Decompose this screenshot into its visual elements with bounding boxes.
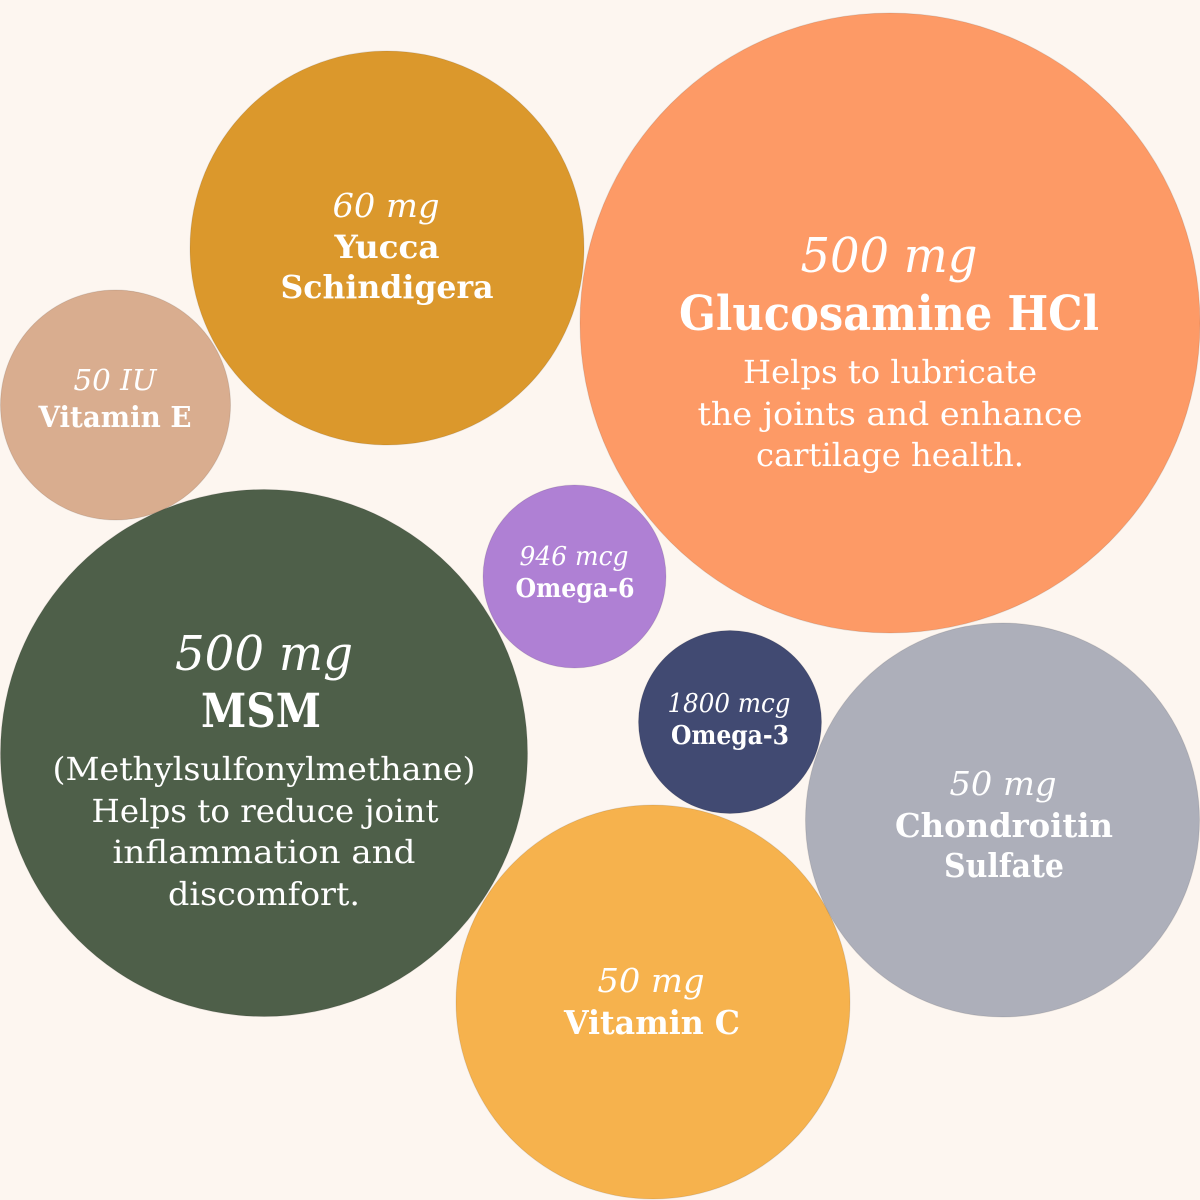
- bubble: Yucca Schindigera: 60 mg: [332, 186, 440, 225]
- bubble: Omega-3: 1800 mcg: [668, 689, 790, 719]
- bubble: Omega-6: Omega-6: [516, 574, 634, 604]
- bubble: Omega-6: 946 mcg: [520, 542, 628, 572]
- bubble: MSM: discomfort.: [168, 875, 360, 913]
- bubble: Chondroitin Sulfate: 50 mg: [950, 764, 1056, 803]
- bubble: Yucca Schindigera: [190, 51, 584, 445]
- bubble: Chondroitin Sulfate: Sulfate: [944, 846, 1064, 885]
- bubble: Glucosamine HCl: the joints and enhance: [698, 395, 1082, 433]
- bubble: MSM: Helps to reduce joint: [92, 792, 439, 830]
- bubble: Yucca Schindigera: Yucca: [333, 228, 440, 266]
- bubble: Glucosamine HCl: 500 mg: [800, 228, 978, 284]
- bubble: Glucosamine HCl: Helps to lubricate: [743, 353, 1037, 391]
- bubble: Chondroitin Sulfate: Chondroitin: [895, 806, 1113, 845]
- bubble: MSM: inflammation and: [112, 833, 416, 871]
- bubble: Chondroitin Sulfate: [806, 623, 1200, 1017]
- bubble: MSM: MSM: [201, 684, 321, 739]
- bubble: Vitamin C: 50 mg: [598, 961, 704, 1000]
- bubble: Glucosamine HCl: cartilage health.: [756, 436, 1024, 474]
- bubble: Omega-3: [638, 630, 822, 814]
- bubble: Glucosamine HCl: [580, 13, 1200, 633]
- bubble: Vitamin E: Vitamin E: [38, 400, 192, 434]
- bubble: Yucca Schindigera: Schindigera: [280, 268, 494, 306]
- bubble: MSM: 500 mg: [175, 626, 353, 682]
- bubble: Vitamin C: [456, 805, 850, 1199]
- bubble: Omega-3: Omega-3: [671, 721, 789, 751]
- bubble: Vitamin E: [0, 290, 230, 520]
- bubble: MSM: [0, 490, 528, 1016]
- bubble: MSM: (Methylsulfonylmethane): [52, 750, 475, 788]
- bubble: Vitamin C: Vitamin C: [563, 1003, 740, 1042]
- bubble: Omega-6: [483, 485, 666, 668]
- bubble: Glucosamine HCl: Glucosamine HCl: [679, 286, 1099, 342]
- bubble: Vitamin E: 50 IU: [74, 363, 158, 397]
